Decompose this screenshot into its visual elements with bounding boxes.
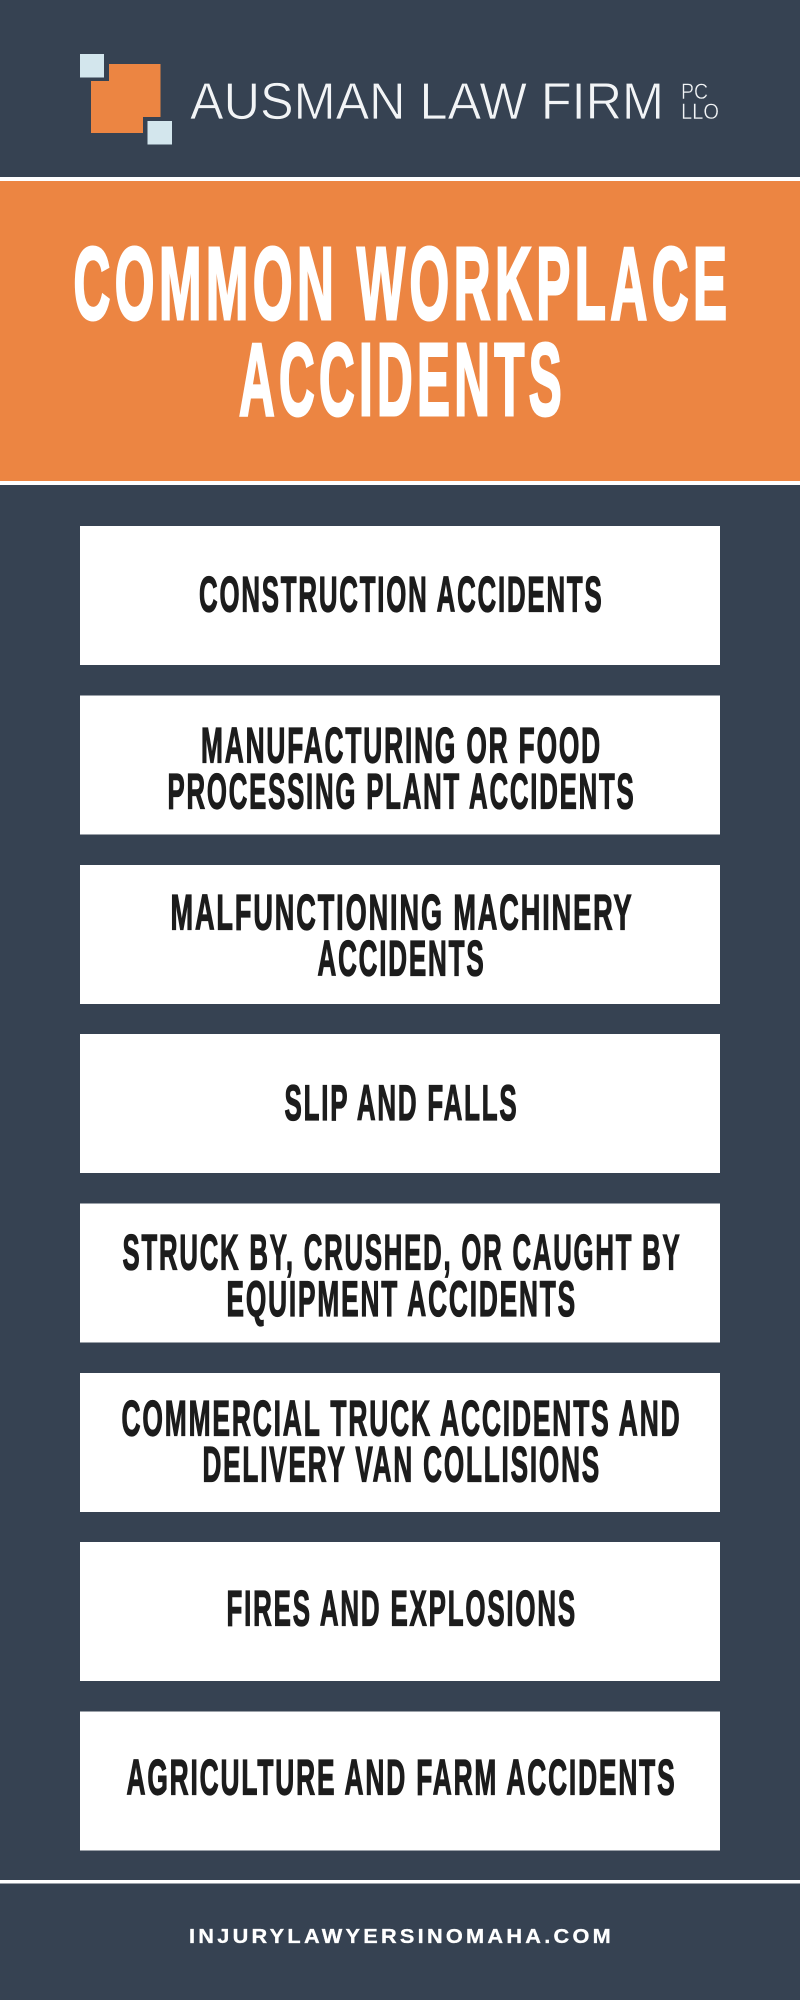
card: slip and falls [80,1034,720,1173]
card: slip and falls: SLIP AND FALLS [284,1075,518,1131]
icon: logo squares [80,54,172,144]
logo wordmark: AUSMAN LAW FIRM [190,73,664,131]
title banner [0,177,800,485]
title [74,226,732,437]
card: fires and explosions [80,1542,720,1681]
card: commercial truck [80,1373,720,1512]
card: agriculture and farm [80,1712,720,1850]
logo suffix PC: PC [681,79,708,104]
card: struck by equipment [80,1204,720,1342]
card: malfunctioning machinery [80,865,720,1004]
card: malfunctioning machinery: ACCIDENTS [318,930,486,986]
card: construction accidents [80,526,720,665]
logo: Ausman Law Firm [80,54,719,144]
footer website: INJURYLAWYERSINOMAHA.COM [189,1926,614,1948]
card: manufacturing accidents [80,696,720,834]
footer divider [0,1880,800,1884]
logo suffix LLO: LLO [681,99,719,124]
